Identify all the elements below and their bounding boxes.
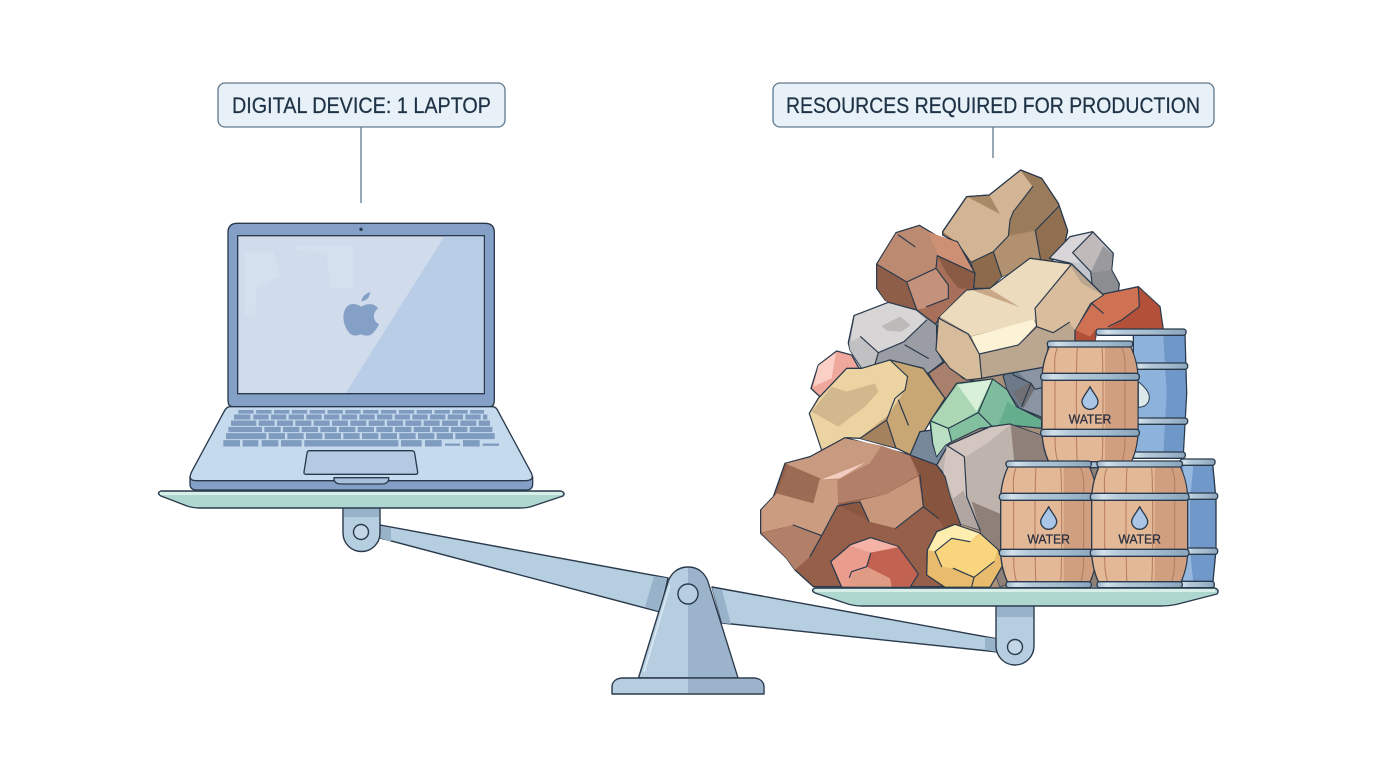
- blue barrel: upper back: [1096, 329, 1188, 458]
- pile filler: [930, 300, 1085, 590]
- left beam: [380, 525, 668, 612]
- rock: light grey top right: [1049, 232, 1119, 295]
- rock: tan sandstone: [809, 360, 945, 455]
- wood barrel: bottom right: WATER: [1118, 532, 1161, 546]
- rock: coral: [831, 538, 918, 587]
- laptop base: [190, 407, 533, 490]
- resource pile: [761, 170, 1163, 590]
- laptop lid: [228, 223, 494, 407]
- label: resources: [773, 83, 1214, 127]
- blue barrel: lower back: [1177, 459, 1218, 588]
- right beam: [712, 587, 998, 652]
- balance scale: [158, 491, 1034, 694]
- rock: yellow: [927, 524, 1004, 587]
- wood barrel: bottom right: [1090, 461, 1189, 588]
- rock: brown mid: [928, 362, 983, 403]
- laptop: [190, 223, 533, 490]
- right hanger: [996, 604, 1034, 665]
- right pan: [812, 588, 1218, 606]
- wood barrel: bottom left: WATER: [1027, 532, 1070, 546]
- left hanger: [343, 506, 380, 552]
- icon: apple logo: [343, 292, 379, 336]
- rock: pink small: [811, 351, 860, 398]
- rock: large brown: [761, 438, 961, 587]
- label: resources: RESOURCES REQUIRED FOR PRODUCTION: [786, 93, 1200, 118]
- rock: dark slate near barrels: [1003, 355, 1048, 420]
- icon: webcam: [359, 228, 363, 231]
- rock: tan top: [943, 170, 1068, 288]
- leader line: resources: [992, 127, 994, 158]
- rock: grey left: [848, 302, 943, 373]
- keyboard: [223, 412, 499, 445]
- fulcrum: [612, 567, 764, 694]
- trackpad: [304, 451, 418, 474]
- rock: green crystal: [930, 379, 1042, 457]
- wood barrel: top: WATER: [1069, 412, 1111, 426]
- label: digital device: DIGITAL DEVICE: 1 LAPTOP: [232, 93, 491, 118]
- wood barrel: top: [1041, 341, 1139, 468]
- rock: round brown: [877, 225, 975, 325]
- laptop screen: [238, 236, 484, 394]
- left pan: [158, 491, 564, 508]
- label: digital device: [218, 83, 505, 127]
- rock: mauve grey: [937, 424, 1050, 587]
- gap filler between barrels: [1085, 465, 1101, 587]
- leader line: laptop: [360, 127, 362, 203]
- rock: red: [1075, 287, 1163, 342]
- lid notch: [334, 478, 389, 484]
- rock: slate behind green: [910, 430, 950, 467]
- wood barrel: bottom left: [999, 461, 1098, 588]
- rock: cream large: [936, 258, 1103, 380]
